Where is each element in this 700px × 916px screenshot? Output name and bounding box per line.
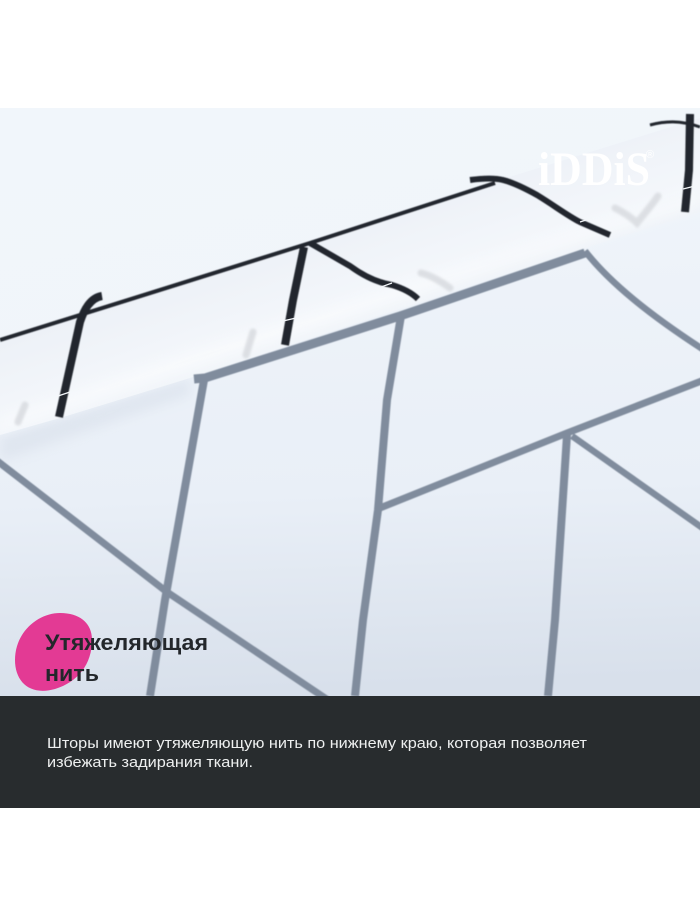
diagonal from apex xyxy=(310,243,418,299)
caption text xyxy=(47,735,587,771)
line along fold edge xyxy=(194,253,585,379)
black pattern lines xyxy=(0,114,700,417)
heading: Утяжеляющая xyxy=(45,630,208,655)
heading xyxy=(45,630,208,686)
strut middle xyxy=(285,247,304,345)
strut left xyxy=(59,296,102,417)
pink blob xyxy=(15,613,92,691)
logo: IDDIS xyxy=(539,150,654,186)
photo: shower curtain fabric xyxy=(0,108,700,700)
curve right of fold xyxy=(470,178,610,235)
fabric background xyxy=(0,108,700,338)
rising line xyxy=(380,380,700,508)
shadow under the fold xyxy=(4,385,185,454)
lower vertical line xyxy=(548,435,567,696)
lower fabric panel xyxy=(0,492,700,696)
top fold line xyxy=(0,183,495,340)
heading: нить xyxy=(45,661,99,686)
grey pattern lines xyxy=(0,251,700,700)
right vertical stripe xyxy=(685,114,690,212)
left vertical line xyxy=(150,380,204,696)
logo: IDDIS: iDDiS xyxy=(538,143,650,196)
caption text: избежать задирания ткани. xyxy=(47,754,253,771)
hem highlight xyxy=(0,192,700,430)
left diagonal line xyxy=(0,460,328,700)
folded hem xyxy=(8,378,188,432)
stitch highlights xyxy=(58,186,695,396)
centre vertical line xyxy=(355,316,401,696)
right curve xyxy=(650,122,700,127)
right descending line xyxy=(585,251,700,350)
branch line xyxy=(572,436,700,529)
caption text: Шторы имеют утяжеляющую нить по нижнему краю, которая позволяет xyxy=(47,735,587,752)
dark caption band xyxy=(0,696,700,808)
logo: IDDIS: ® xyxy=(646,149,654,161)
see-through stitches xyxy=(18,196,658,422)
